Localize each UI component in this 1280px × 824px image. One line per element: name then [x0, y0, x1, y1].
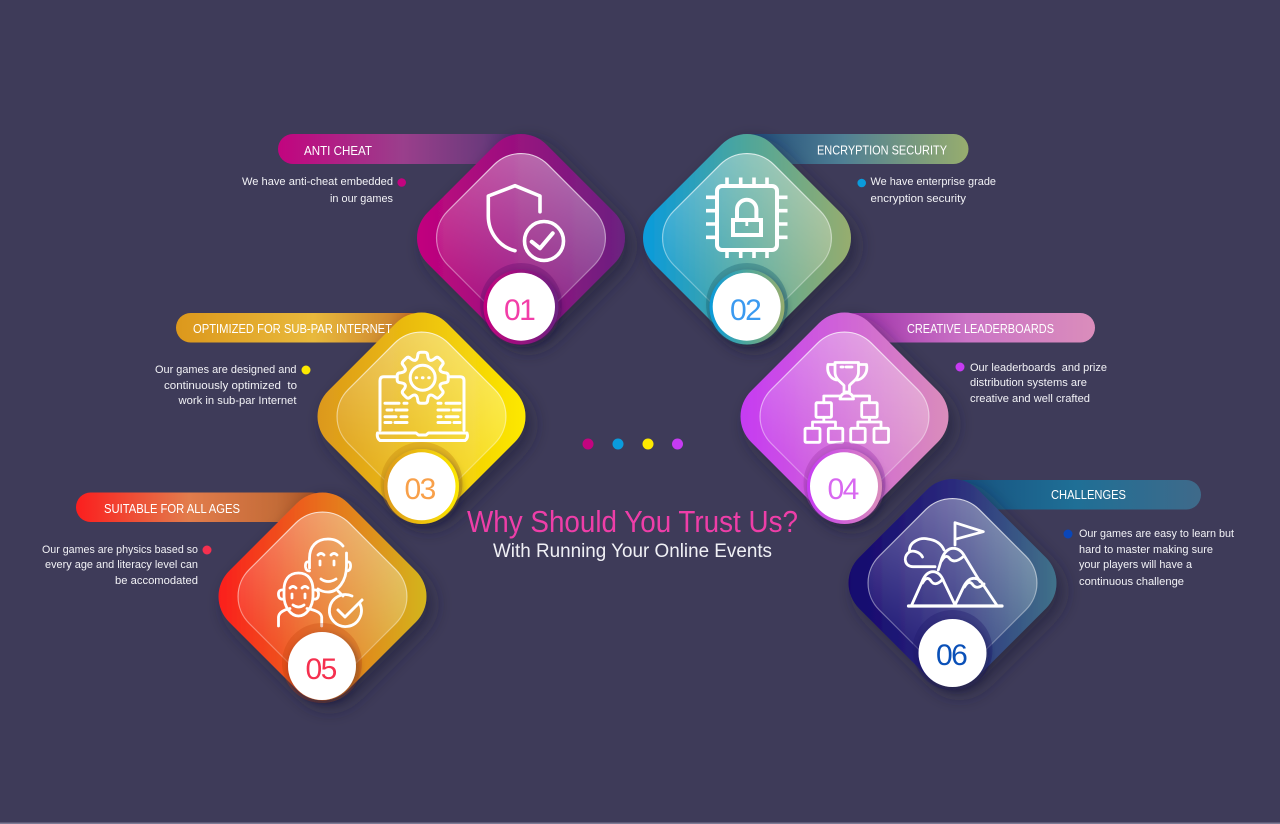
diamond: anti cheat	[417, 134, 625, 342]
text: anti cheat description	[242, 176, 393, 205]
text: challenges description: hard to master making sure	[1079, 544, 1213, 556]
heading: suitable for all ages: SUITABLE FOR ALL AGES	[104, 502, 240, 516]
glass panel: optimized	[337, 332, 506, 501]
ribbon: creative leaderboards	[840, 313, 1095, 342]
bullet: leaderboards	[956, 362, 964, 372]
icon: laptop with gear	[377, 352, 467, 440]
bullet: optimized	[302, 366, 310, 374]
number badge: 02	[706, 263, 788, 345]
number badge: 01: 01	[504, 294, 535, 327]
text: optimized description: Our games are designed and	[155, 364, 296, 376]
icon: shield with check	[488, 186, 564, 260]
heading: encryption security: ENCRYPTION SECURITY	[817, 144, 948, 158]
number badge: 05	[282, 623, 362, 703]
text: encryption description: We have enterprise grade	[870, 176, 996, 188]
number badge: 02: 02	[730, 294, 761, 327]
diamond: leaderboards	[741, 313, 948, 520]
number badge: 05: 05	[306, 653, 337, 686]
number badge: 04: 04	[828, 473, 859, 506]
ribbon: suitable for all ages	[76, 492, 326, 522]
text: challenges description: continuous challenge	[1079, 576, 1184, 588]
glass panel: ages	[238, 512, 407, 681]
decorative dots row	[582, 438, 683, 450]
text: encryption description	[870, 176, 996, 205]
heading: anti cheat: ANTI CHEAT	[304, 144, 372, 158]
panel: 01 anti cheat	[242, 134, 625, 345]
text: anti cheat description: We have anti-cheat embedded	[242, 176, 393, 188]
glass panel: leaderboards	[760, 332, 929, 501]
icon: trophy and bracket	[805, 362, 888, 442]
text: challenges description: your players will have a	[1079, 559, 1193, 571]
text: ages description: Our games are physics based so	[42, 544, 198, 556]
bullet: encryption	[857, 179, 866, 187]
text: optimized description	[155, 364, 297, 407]
icon: chip with lock	[706, 178, 788, 258]
bullet: challenges	[1064, 530, 1072, 538]
panel: 06 challenges	[849, 479, 1234, 690]
text: challenges description: Our games are easy to learn but	[1079, 528, 1234, 540]
panel: 05 suitable for all ages	[42, 492, 426, 703]
title: Why Should You Trust Us?	[467, 504, 798, 539]
number badge: 01	[480, 263, 562, 345]
icon: mountains with flag and cloud	[905, 523, 1002, 606]
panel: 02 encryption security	[643, 134, 996, 345]
ribbon: encryption security	[740, 134, 968, 164]
text: encryption description: encryption security	[870, 193, 967, 205]
ribbon: challenges	[950, 480, 1201, 510]
subtitle: With Running Your Online Events	[493, 541, 772, 562]
bullet: anti cheat	[397, 178, 406, 187]
text: leaderboards description	[970, 362, 1107, 405]
text: ages description: be accomodated	[115, 575, 198, 587]
diamond: ages	[219, 493, 426, 700]
icon: two faces with check	[278, 539, 362, 627]
text: optimized description: work in sub-par Internet	[177, 395, 296, 407]
text: optimized description: continuously optimized to	[164, 380, 297, 392]
panel: 03 optimized for sub-par internet	[155, 313, 525, 524]
text: challenges description	[1079, 528, 1234, 588]
ribbon: anti cheat	[278, 134, 528, 164]
text: leaderboards description: Our leaderboards and prize	[970, 362, 1107, 374]
heading: creative leaderboards: CREATIVE LEADERBOARDS	[907, 322, 1054, 336]
number badge: 03: 03	[404, 473, 436, 506]
diamond: optimized	[318, 313, 525, 520]
text: anti cheat description: in our games	[330, 193, 393, 205]
diamond: encryption	[643, 134, 851, 342]
text: leaderboards description: creative and well crafted	[970, 393, 1090, 405]
ribbon: optimized	[176, 313, 426, 342]
number badge: 06	[912, 610, 992, 690]
number badge: 06: 06	[936, 639, 967, 672]
glass panel: anti cheat	[437, 154, 605, 322]
heading: optimized: OPTIMIZED FOR SUB-PAR INTERNET	[193, 322, 392, 336]
text: ages description: every age and literacy level can	[45, 559, 198, 571]
number badge: 04	[804, 442, 886, 524]
heading: challenges: CHALLENGES	[1051, 488, 1126, 502]
panel: 04 creative leaderboards	[741, 313, 1107, 524]
text: ages description	[42, 544, 198, 587]
glass panel: encryption	[663, 154, 831, 322]
text: leaderboards description: distribution systems are	[970, 377, 1087, 389]
glass panel: challenges	[868, 499, 1037, 667]
number badge: 03	[380, 442, 462, 524]
diamond: challenges	[849, 479, 1056, 687]
bullet: ages	[202, 546, 212, 554]
